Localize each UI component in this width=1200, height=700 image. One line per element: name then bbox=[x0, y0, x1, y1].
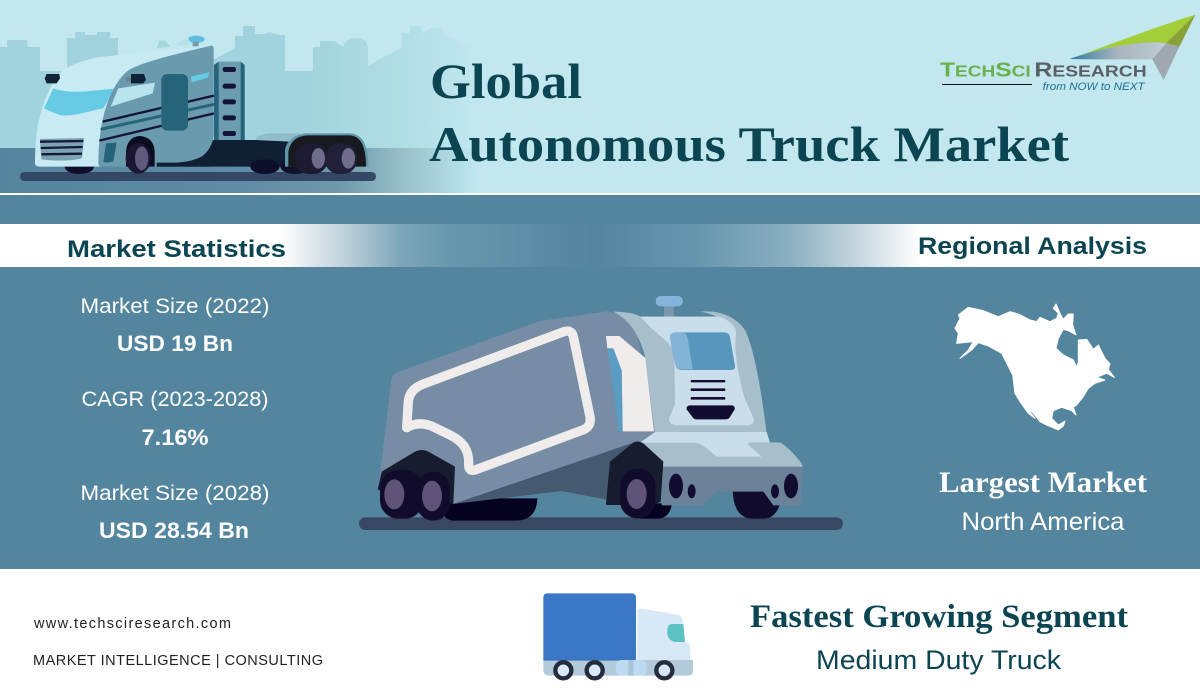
road bbox=[0, 148, 480, 194]
stat: CAGR: 7.16% bbox=[142, 425, 208, 450]
underside bbox=[453, 443, 660, 504]
white line under header bbox=[0, 193, 1200, 195]
stat: market size 2022 bbox=[80, 295, 270, 356]
label: medium duty truck: Medium Duty Truck bbox=[816, 645, 1062, 675]
logo: TechSci Research: from NOW to NEXT bbox=[1043, 81, 1146, 93]
rear fender bbox=[285, 133, 368, 167]
shadow under truck bbox=[20, 172, 376, 181]
label: North America: North America bbox=[962, 508, 1125, 536]
front wheel arch bbox=[606, 441, 663, 505]
ground bar bbox=[359, 517, 843, 530]
rear wheels bbox=[380, 470, 423, 519]
door panel bbox=[606, 336, 654, 431]
stat: market size 2022: Market Size (2022) bbox=[80, 295, 270, 318]
main panel background bbox=[0, 195, 1200, 569]
stat: CAGR bbox=[82, 388, 268, 450]
body white outline bbox=[407, 331, 590, 470]
market statistics list bbox=[80, 295, 270, 543]
stat: market size 2022: USD 19 Bn bbox=[117, 331, 233, 356]
header background bbox=[0, 0, 1200, 194]
bumper bbox=[662, 467, 803, 505]
rear tower bbox=[214, 62, 245, 140]
title bbox=[429, 53, 1069, 172]
website: www.techsciresearch.com bbox=[33, 616, 231, 632]
cab front bbox=[35, 45, 213, 167]
map: North America bbox=[955, 304, 1114, 430]
rear wheels bbox=[295, 143, 328, 174]
heading: regional analysis: Regional Analysis bbox=[918, 233, 1147, 260]
stat: CAGR: CAGR (2023-2028) bbox=[82, 388, 268, 411]
cab front bbox=[640, 317, 754, 425]
front wheel bbox=[620, 468, 655, 518]
stat: market size 2028: USD 28.54 Bn bbox=[99, 518, 249, 543]
bumper top bbox=[640, 432, 803, 467]
footer background bbox=[0, 569, 1200, 700]
mirrors bbox=[45, 74, 60, 83]
logo: TechSci Research bbox=[940, 15, 1195, 93]
stat: market size 2028: Market Size (2028) bbox=[80, 482, 270, 505]
logo: TechSci Research: RESEARCH bbox=[1034, 58, 1147, 81]
stat: market size 2028 bbox=[80, 482, 270, 543]
label: largest market: Largest Market bbox=[939, 466, 1147, 499]
sensor bbox=[664, 303, 674, 317]
label: fastest growing segment: Fastest Growing Segment bbox=[750, 599, 1128, 635]
cargo body bbox=[378, 311, 660, 504]
tagline: MARKET INTELLIGENCE | CONSULTING bbox=[33, 653, 323, 669]
front wheel bbox=[126, 136, 155, 167]
cab sides bbox=[613, 311, 767, 433]
hidden wheels bbox=[440, 498, 537, 521]
windshield bbox=[670, 332, 735, 370]
title: Global bbox=[430, 53, 582, 109]
rear wheel arch bbox=[378, 450, 455, 507]
grille bbox=[691, 380, 725, 382]
illustration: truck in header bbox=[20, 36, 376, 181]
wheels under bbox=[65, 159, 94, 174]
trailer frame bbox=[157, 140, 290, 167]
illustration: central autonomous truck bbox=[359, 296, 843, 530]
icon: delivery truck bbox=[543, 593, 693, 678]
heading: market statistics: Market Statistics bbox=[67, 236, 286, 263]
section header band bbox=[0, 224, 1200, 267]
logo: TechSci Research: TECHSCI bbox=[940, 58, 1031, 81]
title: Autonomous Truck Market bbox=[429, 116, 1069, 172]
city skyline bbox=[0, 26, 480, 148]
cab side bbox=[98, 46, 214, 167]
